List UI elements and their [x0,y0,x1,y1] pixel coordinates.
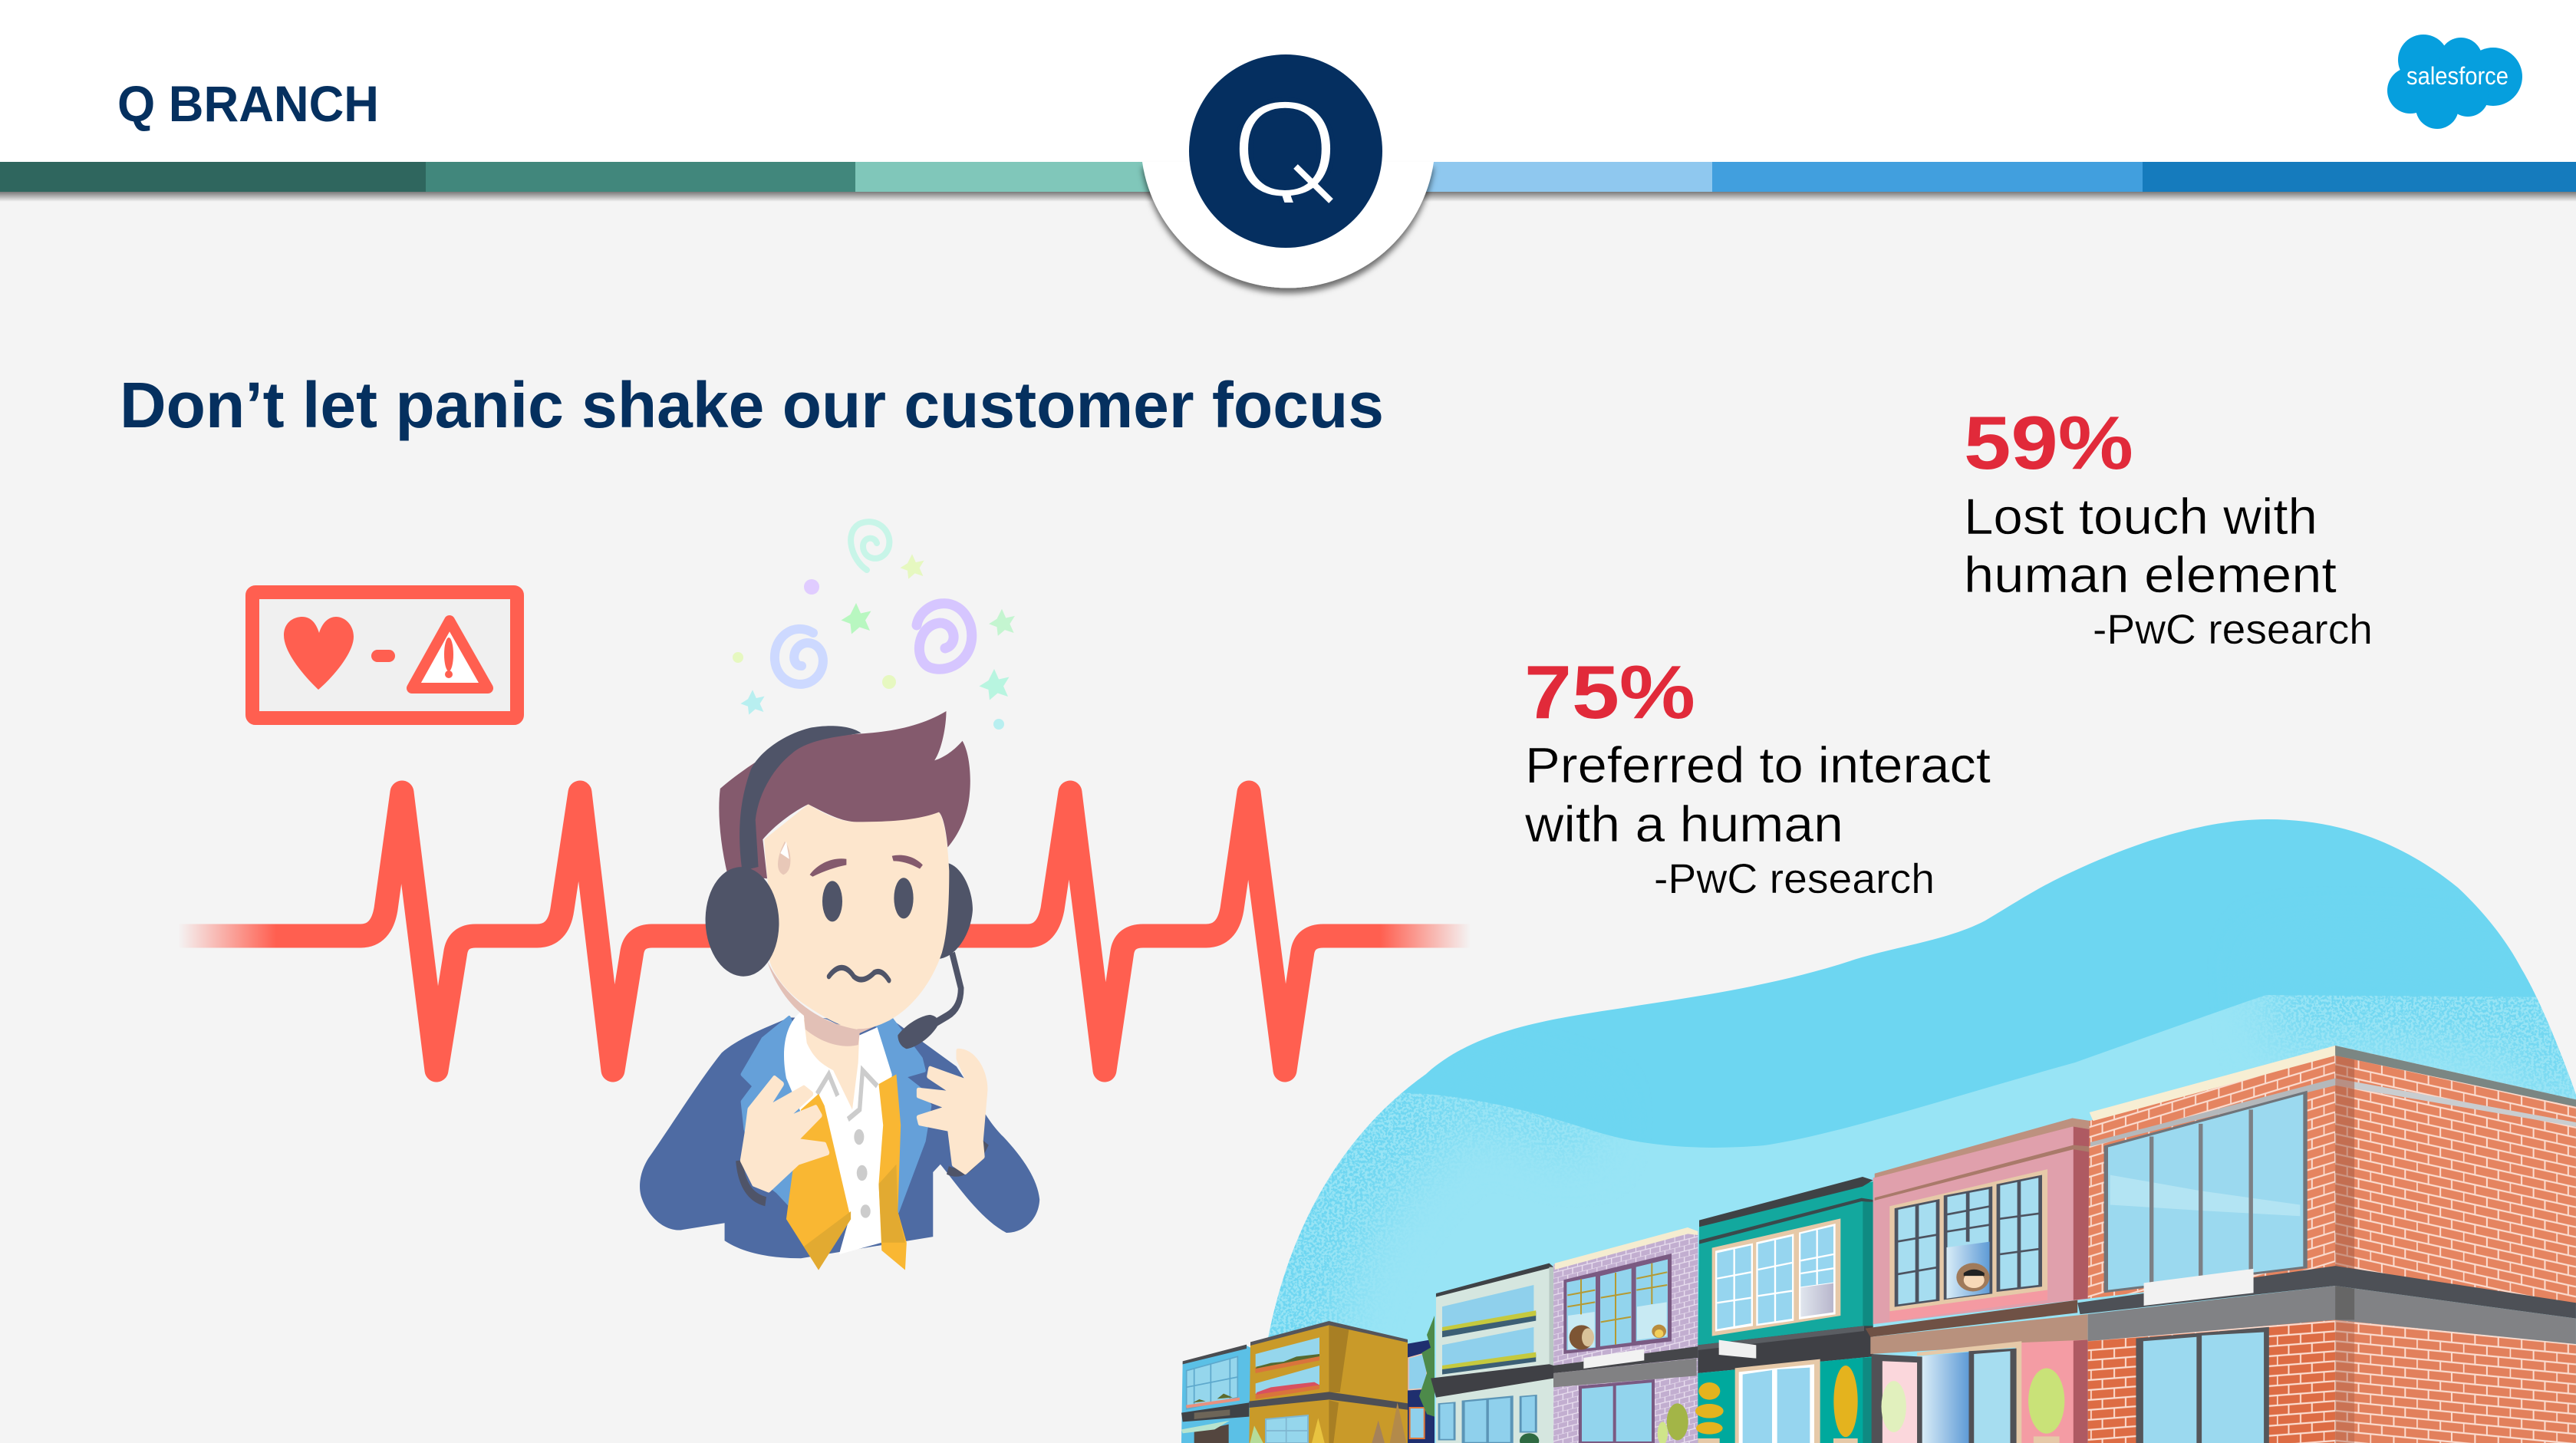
stat: 59%: Lost touch with [1964,488,2317,545]
minus sign [371,650,395,662]
sky blob [1227,819,2576,1443]
headset arm [921,953,961,1031]
building: mustard [1249,1321,1412,1443]
shirt [784,1012,892,1254]
storefront street: blue, mustard and navy blocks [1181,1316,1435,1443]
sweat drop [778,842,790,875]
owl in window [1652,1325,1666,1338]
eyes [822,878,914,921]
stat: 59%: human element [1964,546,2337,603]
neck [804,1020,860,1109]
collar creases [817,1070,878,1119]
salesforce logo [2387,35,2522,129]
far ear cup [939,863,973,959]
building: red brick corner [2077,1046,2576,1443]
building: navy with tree [1408,1316,1435,1443]
building: blue [1181,1345,1250,1443]
left cuff and hand [740,1079,828,1201]
stat: 75%: Preferred to interact [1525,736,1991,793]
heartbeat line [178,792,1471,1070]
astro in window [1956,1263,1989,1291]
storefront street: pale green block [1431,1263,1553,1443]
storefront street: pink and red brick blocks [1866,1046,2576,1443]
wavy mouth [828,967,889,980]
right cuff and hand [918,1051,986,1172]
worried support agent [640,711,1039,1270]
building: lilac brick [1553,1227,1698,1443]
near ear cup [700,861,784,983]
colour bar [0,162,2576,192]
neck shadow [767,960,892,1046]
jacket [640,1017,1039,1258]
bear in window [1570,1325,1594,1349]
eyebrows [810,855,923,877]
shirt buttons [854,1129,871,1218]
hair [719,711,970,878]
brand label: Q BRANCH: Q BRANCH [117,75,379,132]
title: Don’t let panic shake our customer focus [120,369,1384,441]
lapels [743,1017,930,1211]
stat: 75%: -PwC research [1654,855,1935,902]
header band [0,0,2576,162]
salesforce logo: salesforce [2406,62,2508,90]
stat: 59%: -PwC research [2093,605,2373,653]
stat: 59% [1964,400,2373,653]
warning monitor icon [252,592,517,718]
face [764,804,949,1029]
building: teal [1695,1177,1873,1443]
building: pink [1866,1118,2090,1443]
stat: 75%: 75% [1524,650,1695,734]
tie [786,1074,907,1270]
stat: 75%: with a human [1524,796,1843,852]
headset band [740,726,861,871]
dizzy swirls and stars [733,522,1015,730]
storefront street: lilac and teal blocks [1553,1177,1873,1443]
stat: 75% [1524,650,1991,902]
warning triangle [412,621,488,688]
Q emblem: Q [1230,71,1339,227]
microphone [898,1015,939,1049]
header bar shadow [0,192,2576,202]
Q emblem [1142,54,1434,288]
heart icon [284,617,354,690]
stat: 59%: 59% [1964,400,2133,485]
